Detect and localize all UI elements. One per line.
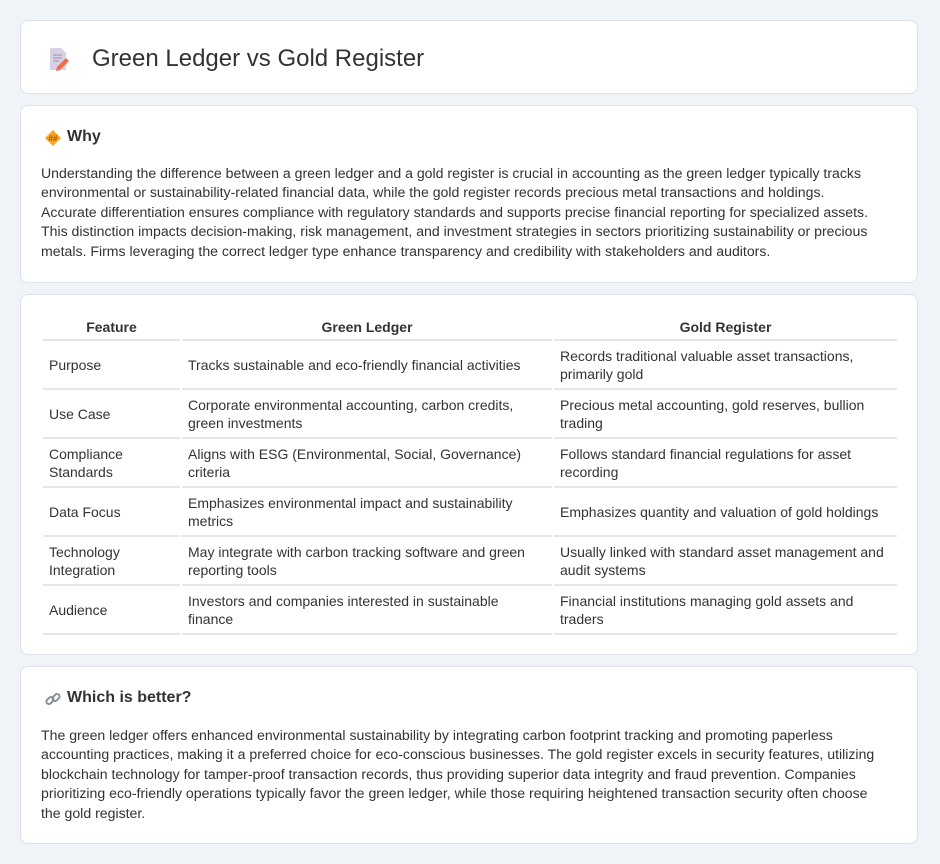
text block: why xyxy=(41,165,868,259)
table: green investments xyxy=(188,414,302,430)
title: Green Ledger vs Gold Register xyxy=(92,45,424,72)
text block: why: Accurate differentiation ensures compliance with regulatory standards and supports precise financial reporting for specialized assets. xyxy=(41,204,868,220)
table: Data Focus xyxy=(49,504,121,520)
table: Audience xyxy=(49,602,107,618)
text block: which is better: the gold register. xyxy=(41,805,145,821)
text block: which is better: accounting practices, making it a preferred choice for eco-conscious businesses. The gold register excels in security features, utilizing xyxy=(41,746,874,762)
text block: why: metals. Firms leveraging the correct ledger type enhance transparency and credibility with stakeholders and auditors. xyxy=(41,243,770,259)
table: traders xyxy=(560,610,604,626)
text block: why: This distinction impacts decision-making, risk management, and investment strategies in sectors prioritizing sustainability or precious xyxy=(41,223,867,239)
table: Precious metal accounting, gold reserves, bullion trading xyxy=(560,396,864,430)
table: Aligns with ESG (Environmental, Social, Governance) criteria xyxy=(188,446,521,480)
heading: why: Why xyxy=(67,128,101,145)
text block: which is better: The green ledger offers enhanced environmental sustainability by integrating carbon footprint tracking and promoting paperless xyxy=(41,727,833,743)
table: Feature xyxy=(86,319,137,335)
panel: which is better xyxy=(20,666,918,844)
table: finance xyxy=(188,610,233,626)
icon: document with pencil xyxy=(50,48,69,71)
heading: which is better: Which is better? xyxy=(67,689,191,706)
table: May integrate with carbon tracking software and green reporting tools xyxy=(188,544,525,578)
panel: comparison table xyxy=(20,294,918,655)
icon: diamond xyxy=(45,130,61,146)
panel: why xyxy=(20,105,918,283)
table: Compliance Standards xyxy=(49,446,123,480)
table: Emphasizes quantity and valuation of gold holdings xyxy=(560,504,878,520)
table: Usually linked with standard asset management and audit systems xyxy=(560,544,884,578)
table xyxy=(43,319,897,635)
header card xyxy=(20,20,918,94)
text block: why: environmental or sustainability-related financial data, while the gold register records precious metal transactions and holdings. xyxy=(41,184,824,200)
text block: which is better: blockchain technology for tamper-proof transaction records, thus providing superior data integrity and fraud prevention. Companies xyxy=(41,766,856,782)
table: Corporate environmental accounting, carbon credits, xyxy=(188,396,513,412)
table: Emphasizes environmental impact and sustainability metrics xyxy=(188,494,512,528)
table: Follows standard financial regulations for asset recording xyxy=(560,446,851,480)
icon: link xyxy=(45,693,60,705)
text block: which is better: prioritizing eco-friendly operations typically favor the green ledger, while those requiring heightened transaction security often choose xyxy=(41,785,868,801)
table: Use Case xyxy=(49,406,110,422)
text block: which is better xyxy=(41,727,874,821)
table: Purpose xyxy=(49,356,101,372)
text block: why: Understanding the difference between a green ledger and a gold register is crucial in accounting as the green ledger typically tracks xyxy=(41,165,861,181)
table: Investors and companies interested in sustainable xyxy=(188,592,499,608)
table: Tracks sustainable and eco-friendly financial activities xyxy=(188,356,521,372)
icon: diamond: ## xyxy=(49,134,58,143)
table: Green Ledger xyxy=(321,319,413,335)
table: Gold Register xyxy=(680,319,771,335)
table: Technology Integration xyxy=(49,544,120,578)
table: Records traditional valuable asset transactions, primarily gold xyxy=(560,348,853,382)
table: Financial institutions managing gold assets and xyxy=(560,592,853,608)
